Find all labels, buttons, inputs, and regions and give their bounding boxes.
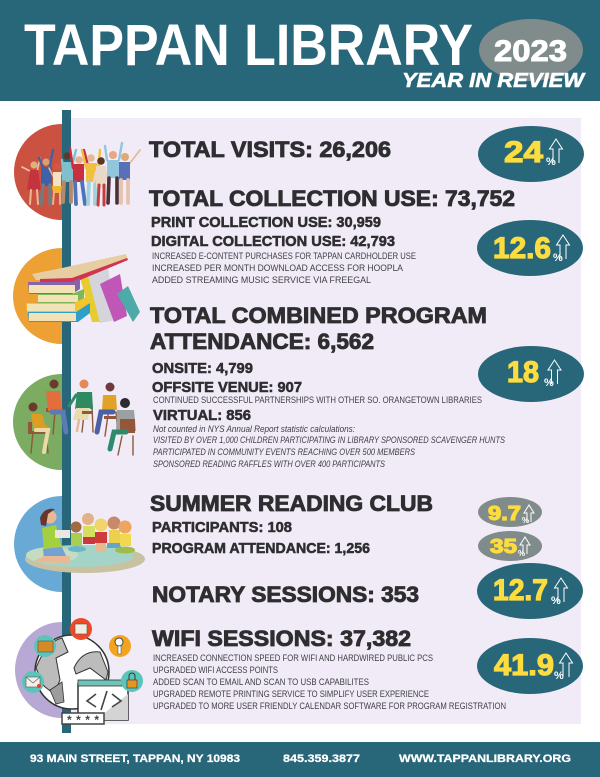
icon: password field: ****	[67, 713, 99, 727]
badge: 35 percent: 35	[490, 536, 517, 558]
section: wifi sessions: UPGRADED REMOTE PRINTING SERVICE TO SIMPLIFY USER EXPERIENCE	[153, 689, 429, 699]
details: ADDED STREAMING MUSIC SERVICE VIA FREEGAL	[152, 275, 371, 285]
stats and details: Not counted in NYS Annual Report statistic calculations:	[153, 424, 356, 434]
stats and details: OFFSITE VENUE: 907	[152, 379, 302, 396]
badge: 24 percent: %	[546, 156, 556, 168]
print stat: PRINT COLLECTION USE: 30,959	[151, 214, 381, 231]
stats and details: ONSITE: 4,799	[152, 360, 253, 377]
stats and details: PARTICIPATED IN COMMUNITY EVENTS REACHING OVER 500 MEMBERS	[153, 447, 415, 457]
section: summer reading club: PARTICIPANTS: 108	[152, 519, 292, 536]
section: wifi sessions: WIFI SESSIONS: 37,382	[152, 626, 411, 651]
icon: mail badge	[22, 671, 44, 693]
icon: code window	[78, 680, 128, 720]
section: total visits: TOTAL VISITS: 26,206	[149, 137, 391, 162]
header banner	[0, 0, 600, 101]
footer: WWW.TAPPANLIBRARY.ORG	[399, 753, 571, 765]
section: summer reading club: PROGRAM ATTENDANCE: 1,256	[152, 540, 370, 557]
badge: 35 percent	[478, 531, 542, 561]
stats and details: SPONSORED READING RAFFLES WITH OVER 400 PARTICIPANTS	[153, 459, 385, 469]
badge: 12.6 percent	[477, 220, 583, 276]
section: program attendance	[150, 303, 505, 469]
details: INCREASED E-CONTENT PURCHASES FOR TAPPAN CARDHOLDER USE	[152, 251, 416, 261]
icon: globe and web security	[22, 618, 143, 727]
icon: stack of books	[26, 254, 140, 323]
badge: 18 percent: 18	[507, 356, 539, 389]
content panel	[71, 118, 581, 724]
year badge: 2023	[494, 35, 567, 68]
badge: 41.9 percent: 41.9	[494, 649, 554, 682]
section: program attendance: ATTENDANCE: 6,562	[150, 329, 374, 354]
section: summer reading club: SUMMER READING CLUB	[150, 491, 433, 516]
badge: 12.7 percent	[477, 563, 583, 619]
stats and details: VIRTUAL: 856	[153, 407, 251, 424]
section: collection use	[149, 186, 515, 285]
badge: 12.6 percent: 12.6	[493, 232, 551, 265]
section: wifi sessions: UPGRADED TO MORE USER FRIENDLY CALENDAR SOFTWARE FOR PROGRAM REGISTRATION	[153, 701, 506, 711]
icon: teacher reading to children	[25, 509, 145, 573]
digital stat: DIGITAL COLLECTION USE: 42,793	[151, 233, 395, 250]
title: TAPPAN LIBRARY	[24, 13, 473, 78]
badge: 9.7 percent: %	[522, 516, 529, 525]
year badge	[479, 19, 583, 81]
vertical strip	[62, 110, 71, 733]
icon: code badge	[70, 618, 92, 640]
badge: 41.9 percent: %	[554, 670, 564, 682]
icon: folder badge	[34, 635, 56, 657]
section: summer reading club	[150, 491, 433, 557]
stats and details	[152, 360, 505, 469]
badge: 24 percent	[478, 126, 584, 182]
icon: group meeting	[28, 380, 136, 455]
details: INCREASED PER MONTH DOWNLOAD ACCESS FOR HOOPLA	[152, 263, 403, 273]
icon: lock badge	[121, 670, 143, 692]
badge: 41.9 percent	[477, 638, 583, 694]
section: wifi sessions: UPGRADED WIFI ACCESS POINTS	[153, 665, 278, 675]
details	[152, 251, 416, 285]
section: wifi sessions	[152, 626, 506, 711]
section: wifi sessions: INCREASED CONNECTION SPEED FOR WIFI AND HARDWIRED PUBLIC PCS	[153, 653, 433, 663]
panel cover for ovals	[71, 118, 131, 724]
icon: crowd of people	[22, 143, 140, 205]
badge: 12.7 percent: %	[551, 595, 561, 607]
subtitle: YEAR IN REVIEW	[402, 70, 586, 92]
stats and details: VISITED BY OVER 1,000 CHILDREN PARTICIPATING IN LIBRARY SPONSORED SCAVENGER HUNTS	[153, 435, 505, 445]
badge: 12.6 percent: %	[553, 252, 563, 264]
badge: 9.7 percent	[478, 497, 542, 527]
section ovals	[13, 124, 111, 718]
badge: 18 percent	[478, 346, 584, 402]
heading: TOTAL COLLECTION USE: 73,752	[149, 186, 515, 211]
badge: 12.7 percent: 12.7	[493, 574, 548, 607]
badge: 9.7 percent: 9.7	[488, 503, 521, 525]
footer	[0, 742, 600, 777]
badge: 35 percent: %	[518, 549, 525, 558]
stats and details: CONTINUED SUCCESSFUL PARTNERSHIPS WITH OTHER SO. ORANGETOWN LIBRARIES	[153, 395, 482, 405]
footer: 845.359.3877	[283, 753, 360, 765]
footer: 93 MAIN STREET, TAPPAN, NY 10983	[30, 753, 240, 765]
badge: 24 percent: 24	[504, 136, 543, 169]
section: notary sessions: NOTARY SESSIONS: 353	[152, 582, 419, 607]
section: wifi sessions: ADDED SCAN TO EMAIL AND SCAN TO USB CAPABILITES	[153, 677, 369, 687]
icon: search badge	[109, 635, 131, 657]
badge: 18 percent: %	[544, 377, 554, 389]
heading: TOTAL COMBINED PROGRAM	[150, 303, 487, 328]
